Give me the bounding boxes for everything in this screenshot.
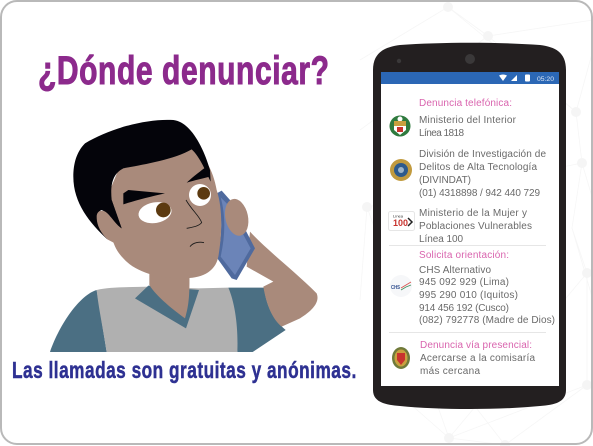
- collar: [135, 286, 199, 328]
- entry: CHS Alternativo: (082) 792778 (Madre de Dios): [419, 315, 555, 326]
- icon: Peru coat of arms: [390, 116, 410, 136]
- entry: DIVINDAT: [419, 149, 546, 199]
- entry: Ministerio de la Mujer: Línea 100: [419, 234, 463, 245]
- section: denuncia telefónica: [388, 98, 546, 245]
- status bar: [381, 72, 559, 84]
- heading: denuncia vía presencial: Denuncia vía presencial:: [420, 340, 532, 351]
- entry: CHS Alternativo: 995 290 010 (Iquitos): [419, 290, 518, 301]
- icon: Línea 100 logo: 100: [393, 218, 408, 229]
- entry: comisaría: más cercana: [420, 366, 480, 377]
- screen: [381, 84, 559, 386]
- neck: [149, 270, 189, 318]
- illustration: man on the phone: [50, 120, 318, 352]
- status bar: 05:20: [537, 76, 554, 83]
- icon: CHS Alternativo logo: CHS: [391, 285, 401, 291]
- entry: DIVINDAT: (01) 4318898 / 942 440 729: [419, 188, 540, 199]
- hand: [225, 198, 248, 236]
- icon: CHS Alternativo logo: [390, 275, 412, 297]
- entry: CHS Alternativo: 914 456 192 (Cusco): [419, 303, 509, 314]
- face: [109, 148, 221, 278]
- subtitle: Las llamadas son gratuitas y anónimas.: [12, 359, 356, 384]
- entry: comisaría: Acercarse a la comisaría: [420, 353, 535, 364]
- vest: [97, 287, 238, 352]
- phone in hand: [217, 191, 255, 280]
- hair: [73, 120, 211, 239]
- icon: police badge: [392, 347, 410, 369]
- icon: Línea 100 logo: [388, 212, 414, 230]
- entry: Ministerio de la Mujer: [419, 208, 532, 245]
- eyes: [137, 184, 211, 226]
- icon: Línea 100 logo: Línea: [393, 214, 404, 218]
- entry: DIVINDAT: Delitos de Alta Tecnología: [419, 162, 537, 173]
- heading: solicita orientación: Solicita orientación:: [419, 250, 509, 261]
- entry: Ministerio de la Mujer: Poblaciones Vulnerables: [419, 221, 532, 232]
- nose and mouth: [186, 200, 204, 247]
- entry: Ministerio del Interior: [419, 115, 517, 139]
- shirt sleeves: [50, 288, 286, 352]
- section: solicita orientación: [390, 250, 555, 326]
- entry: Ministerio de la Mujer: Ministerio de la Mujer y: [419, 208, 527, 219]
- entry: CHS Alternativo: 945 092 929 (Lima): [419, 277, 509, 288]
- entry: Ministerio del Interior: Ministerio del Interior: [419, 115, 517, 126]
- entry: DIVINDAT: (DIVINDAT): [419, 175, 471, 186]
- eyebrows: [123, 167, 210, 204]
- title: ¿Dónde denunciar?: [38, 49, 329, 93]
- phone mockup: [373, 43, 566, 409]
- entry: CHS Alternativo: [419, 265, 555, 326]
- entry: CHS Alternativo: CHS Alternativo: [419, 265, 491, 276]
- phone body: [373, 43, 566, 409]
- arm: [247, 232, 318, 327]
- entry: DIVINDAT: División de Investigación de: [419, 149, 546, 160]
- heading: denuncia telefónica: Denuncia telefónica:: [419, 98, 512, 109]
- icon: DIVINDAT badge: [390, 159, 412, 181]
- entry: Ministerio del Interior: Línea 1818: [419, 128, 464, 139]
- ear: [96, 210, 114, 242]
- entry: comisaría: [420, 353, 535, 377]
- camera and sensor: [397, 54, 475, 64]
- section: denuncia vía presencial: [392, 340, 535, 377]
